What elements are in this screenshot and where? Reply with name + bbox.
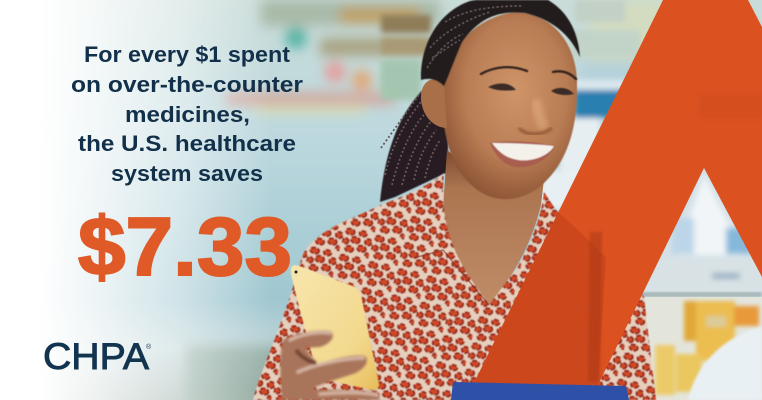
- mouth: [490, 141, 555, 167]
- headline: [71, 42, 303, 186]
- white blurred figure bottom right: [688, 327, 762, 400]
- big number: $7.33: [78, 200, 292, 293]
- CHPA logo: ®: [146, 343, 152, 351]
- eyes: [488, 84, 574, 95]
- blurred foreground counter: [185, 345, 305, 400]
- face: [441, 12, 577, 199]
- leopard texture showing through the orange: [474, 212, 606, 385]
- ear: [421, 79, 447, 128]
- neck: [443, 150, 545, 305]
- nose shading: [519, 100, 552, 134]
- shirt: [253, 173, 656, 400]
- eyebrows: [481, 67, 576, 79]
- headline: the U.S. healthcare: [78, 131, 296, 156]
- hair: top braids: [421, 0, 580, 86]
- right-hand shelf with boxes: [600, 165, 762, 400]
- hair: back braids: [380, 85, 448, 202]
- hand: [280, 330, 380, 400]
- CHPA logo: CHPA: [43, 336, 149, 377]
- orange CHPA letter A shape: [473, 0, 762, 385]
- headline: system saves: [111, 161, 263, 186]
- headline: on over-the-counter: [71, 72, 303, 97]
- woman: [253, 0, 656, 400]
- headline: medicines,: [125, 102, 250, 127]
- phone: [291, 265, 379, 390]
- white left fade: [0, 0, 400, 400]
- headline: For every $1 spent: [84, 42, 291, 67]
- blue book: [451, 382, 629, 400]
